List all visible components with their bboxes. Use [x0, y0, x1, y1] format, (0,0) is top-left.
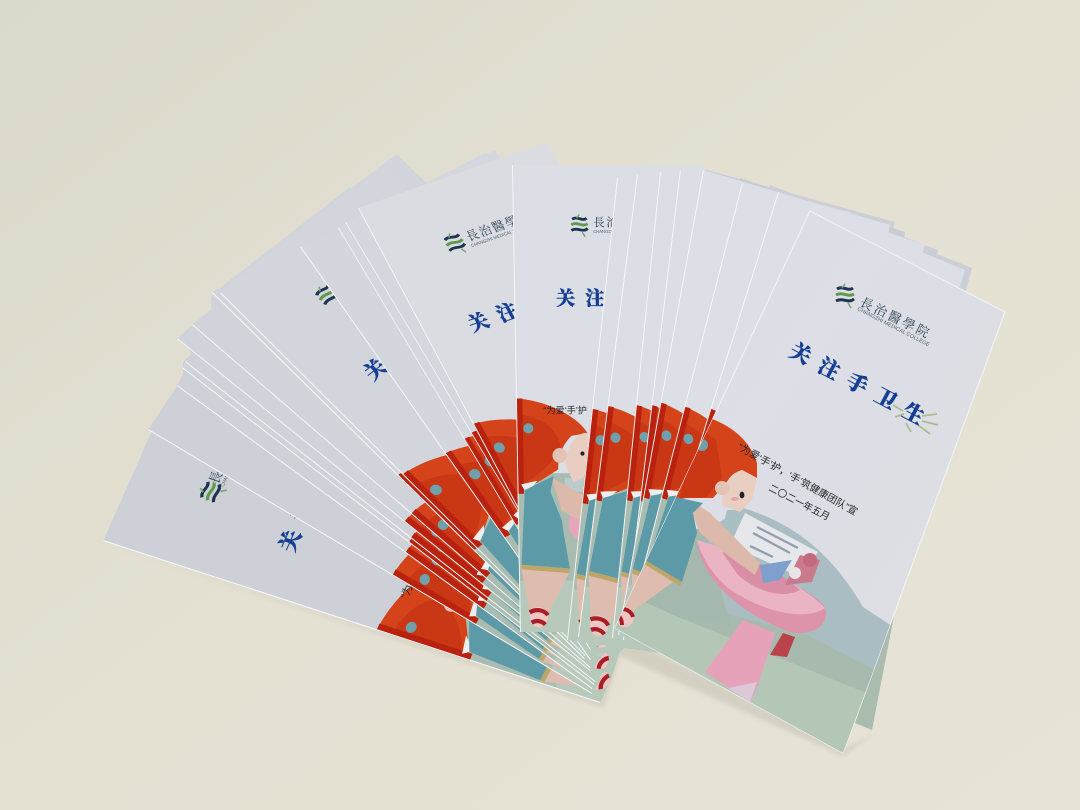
brochure 12: [345, 150, 518, 512]
brochure strip 1: [567, 178, 659, 653]
wall band: [680, 614, 874, 692]
main front brochure: [600, 211, 1005, 753]
dress: [645, 497, 703, 582]
brochure 5: [185, 361, 609, 682]
soft shadow beneath brochures: [105, 544, 876, 756]
tap: [785, 553, 820, 585]
brochure 4: [183, 368, 606, 685]
brochure 8: [211, 154, 585, 659]
brochure 6: [178, 294, 606, 671]
brochure 13: logo and title visible: 关注手卫生: [464, 266, 618, 336]
brochure strip 7: [697, 192, 965, 451]
logo: CHANGZHI MEDICAL COLLEGE: [856, 306, 931, 348]
brochure 1: lowest left, logo and title visible: “为爱‘手’护: [398, 551, 430, 600]
brochure 1: lowest left, logo and title visible: 長治醫學院: [206, 413, 251, 486]
brochure strip 4: [623, 170, 681, 640]
hair: [675, 419, 757, 500]
fanned brochures: left fan: [103, 142, 705, 703]
logo: [836, 284, 934, 348]
brochure 1: lowest left, logo and title visible: CHANGZHI MEDICAL COLLEGE: [220, 421, 254, 488]
leg: [618, 562, 673, 625]
brochure 3: [177, 385, 603, 689]
brochure strip 6: [643, 183, 925, 566]
brochure 11: [338, 228, 601, 650]
brochure strip 3: [612, 172, 850, 678]
decoration behind title: [893, 405, 938, 434]
brochure 14: front of left fan: “为爱‘手’护: [543, 404, 587, 415]
soap bottle: [760, 560, 792, 583]
notice on wall: [734, 513, 818, 572]
brochures peeking out behind the stack: [700, 168, 972, 730]
brochure 10: [300, 154, 607, 660]
brochure 13: logo and title visible: CHANGZHI MEDICAL COLLEGE: [470, 222, 533, 248]
sink basin: [697, 540, 826, 633]
cover illustration: girl washing hands at sink: [600, 410, 895, 753]
floor: [600, 600, 866, 753]
dress hem: [644, 560, 682, 586]
brochure 7: [192, 188, 604, 668]
arm: [693, 505, 760, 575]
title: 关注手卫生: [786, 338, 938, 435]
brochure 14: front of left fan: 長治醫學院: [593, 216, 659, 230]
brochure 14: front of left fan: 关注手卫生: [556, 288, 702, 310]
neck shadow: [724, 510, 738, 519]
date: 二〇二一年五月: [767, 482, 832, 523]
brochure strip 5: [618, 170, 890, 637]
brochure 14: front of left fan: CHANGZHI MEDICAL COLLEGE: [593, 229, 656, 234]
brochure 14: front of left fan: [512, 165, 713, 632]
brochure 1: lowest left, logo and title visible: [103, 348, 624, 703]
cover paper: [615, 211, 1005, 753]
brochure 9: logo and title partly visible: 关注手卫生: [359, 270, 501, 385]
team slogan: “为爱‘手’护，‘手’筑健康团队”宣: [736, 440, 860, 518]
face: [715, 470, 757, 512]
brochure 1: lowest left, logo and title visible: 关注手卫生: [275, 396, 365, 555]
sock: [616, 607, 634, 627]
brochure strip 2: [578, 175, 638, 638]
brochure 9: logo and title partly visible: [220, 285, 586, 656]
drain pipe: [770, 633, 795, 657]
brochure 13: logo and title visible: [358, 142, 559, 508]
brochure 2: [148, 410, 604, 694]
sink pedestal: [705, 620, 775, 702]
fanned brochures: right fan: [567, 170, 965, 703]
green area behind girl: [626, 524, 727, 618]
hair clip: [698, 439, 708, 451]
logo: 長治醫學院: [858, 294, 934, 342]
brochure 13: logo and title visible: 長治醫學院: [463, 209, 535, 244]
wall arc: [708, 508, 890, 692]
